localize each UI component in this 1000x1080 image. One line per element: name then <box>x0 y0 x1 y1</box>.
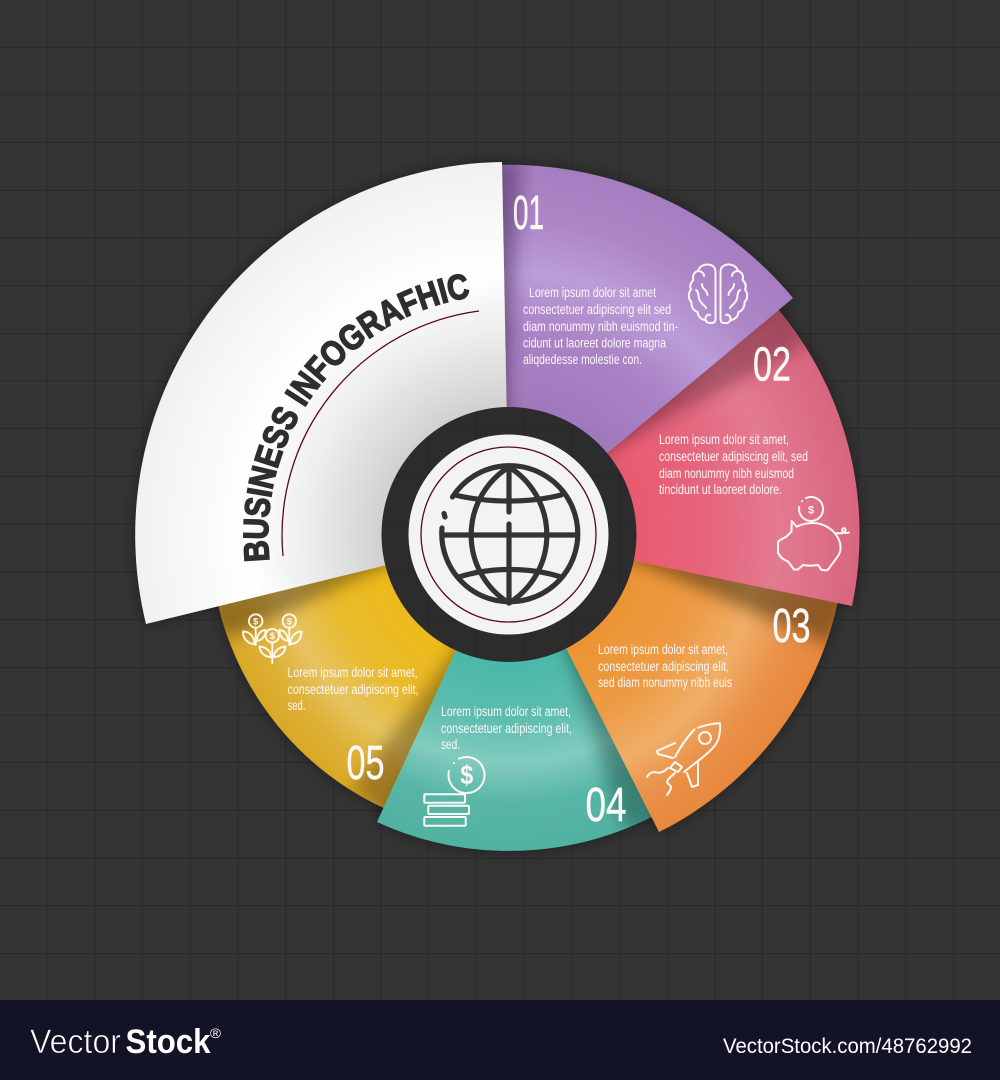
number 03: 03 <box>772 600 810 653</box>
icon: money plants: $ <box>253 616 259 628</box>
panel 03: orange segment <box>558 560 838 832</box>
number 01: 01 <box>513 187 544 240</box>
stock id url: VectorStock.com/48762992 <box>723 1035 972 1058</box>
icon: money plants <box>243 614 302 663</box>
footer band <box>0 1000 1000 1080</box>
text block 03: sed diam nonummy nibh euis <box>598 675 732 690</box>
panel 05: yellow segment <box>218 565 456 808</box>
center hub <box>382 407 636 662</box>
text block 01: cidunt ut laoreet dolore magna <box>523 336 666 350</box>
number 02: 02 <box>753 338 791 392</box>
text block 02: diam nonummy nibh euismod <box>659 466 794 481</box>
text block 01: Lorem ipsum dolor sit amet <box>529 285 656 300</box>
text block 01: aliqdedesse molestie con. <box>523 352 642 367</box>
text block 05: sed. <box>288 698 306 713</box>
text block 01 <box>523 285 678 367</box>
icon: money plants: $ <box>270 631 276 642</box>
text block 04: sed. <box>441 737 460 752</box>
number 04: 04 <box>586 779 626 832</box>
panel: white title segment <box>134 161 516 624</box>
text block 02: tincidunt ut laoreet dolore. <box>659 482 782 497</box>
number 05: 05 <box>346 737 384 790</box>
panel 02: pink segment <box>607 310 862 612</box>
text block 04: Lorem ipsum dolor sit amet, <box>441 704 571 719</box>
title underline arc <box>282 311 479 556</box>
text block 05: Lorem ipsum dolor sit amet, <box>288 665 418 680</box>
icon: coin stack: $ <box>460 760 473 790</box>
text block 02 <box>659 432 808 497</box>
panel 04: teal segment <box>376 646 652 852</box>
text block 05: consectetuer adipiscing elit, <box>288 682 418 697</box>
panel 01: purple segment <box>502 163 793 461</box>
text block 02: consectetuer adipiscing elit, sed <box>659 449 808 464</box>
icon: rocket <box>647 723 720 795</box>
icon: money plants: $ <box>287 616 293 628</box>
text block 03: consectetuer adipiscing elit, <box>598 659 729 674</box>
title: BUSINESS INFOGRAFHIC <box>242 274 470 562</box>
text block 05 <box>288 665 418 713</box>
text block 02: Lorem ipsum dolor sit amet, <box>659 432 789 447</box>
icon: coin stack <box>424 757 485 826</box>
icon: piggy bank: $ <box>808 504 814 516</box>
text block 04: consectetuer adipiscing elit, <box>441 721 572 736</box>
text block 01: consectetuer adipiscing elit sed <box>523 302 671 317</box>
text block 04 <box>441 704 572 752</box>
logo: VectorStock <box>30 1023 222 1061</box>
logo: VectorStock: ® <box>210 1025 222 1041</box>
text block 03: Lorem ipsum dolor sit amet, <box>598 642 728 657</box>
icon: piggy bank <box>778 497 849 570</box>
logo: VectorStock: Vector <box>30 1023 121 1061</box>
logo: VectorStock: Stock <box>126 1023 211 1061</box>
text block 01: diam nonummy nibh euismod tin- <box>523 319 678 334</box>
icon: brain <box>689 264 747 323</box>
text block 03 <box>598 642 732 690</box>
icon: globe <box>442 466 578 603</box>
